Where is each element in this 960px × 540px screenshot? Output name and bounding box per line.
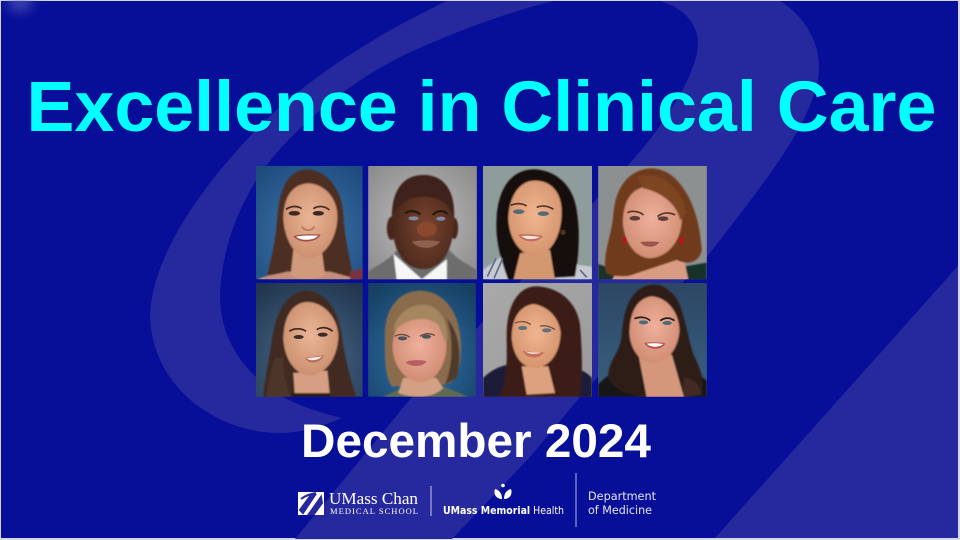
portrait 4: woman with auburn hair and red earrings [598, 166, 707, 280]
icon: UMass Chan shield [298, 492, 324, 515]
icon: UMass Memorial flower [494, 484, 512, 499]
portrait 7: woman with dark auburn hair on grey [483, 283, 592, 397]
portrait 1: woman with long brown hair on blue [256, 166, 363, 280]
portrait 2: man in grey suit [368, 166, 477, 280]
logo: UMass Chan Medical School: UMass Chan [329, 489, 418, 508]
logo: UMass Memorial Health [443, 484, 564, 517]
logo strip [298, 473, 656, 527]
logo: UMass Chan Medical School: MEDICAL SCHOOL [330, 506, 418, 516]
title: Excellence in Clinical Care [26, 67, 936, 147]
logo: UMass Memorial Health: UMass Memorial Health [443, 505, 564, 517]
date heading: December 2024 [301, 415, 651, 468]
top-left glint [8, 0, 32, 11]
logo: Department of Medicine [588, 489, 656, 517]
portrait 3: woman with black hair and striped top [483, 166, 592, 280]
photo grid [256, 166, 707, 398]
portrait 5: woman with straight brown hair on dark blue [256, 283, 363, 397]
portrait 6: woman with short highlighted hair on blue [368, 283, 476, 397]
logo: Department of Medicine: of Medicine [588, 503, 652, 517]
logo: Department of Medicine: Department [588, 489, 656, 503]
logo: UMass Chan Medical School [298, 489, 418, 516]
portrait 8: woman with dark wavy hair on slate blue [598, 283, 707, 397]
